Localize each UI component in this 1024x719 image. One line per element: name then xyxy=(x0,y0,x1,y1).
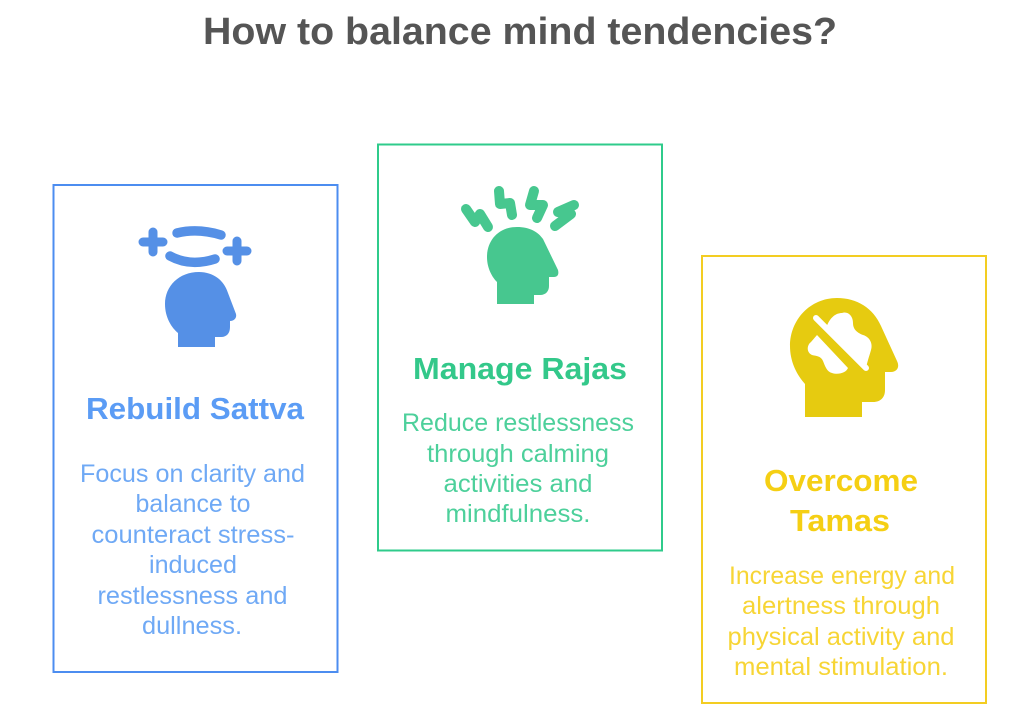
text block: Rebuild Sattva description: induced xyxy=(149,551,237,579)
card border: Overcome Tamas xyxy=(702,256,986,703)
text block: Manage Rajas description: activities and xyxy=(444,470,592,498)
text block: Overcome Tamas description: alertness through xyxy=(742,592,940,620)
text block: Rebuild Sattva description: restlessness and xyxy=(98,582,288,610)
text block: Rebuild Sattva description: balance to xyxy=(136,490,250,518)
text block: Manage Rajas description: Reduce restlessness xyxy=(402,409,634,437)
heading: Overcome Tamas: Tamas xyxy=(790,503,890,538)
heading: Overcome Tamas xyxy=(764,463,918,538)
heading: Manage Rajas: Manage Rajas xyxy=(413,351,627,386)
icon: head with crossed-out brain xyxy=(790,298,898,417)
text block: Manage Rajas description: mindfulness. xyxy=(446,500,590,528)
text block: Manage Rajas description: through calming xyxy=(427,440,609,468)
text block: Overcome Tamas description xyxy=(728,562,955,681)
text block: Rebuild Sattva description: dullness. xyxy=(142,612,242,640)
title: How to balance mind tendencies? xyxy=(203,11,837,53)
icon: head with lightning bolts xyxy=(466,191,574,304)
heading: Rebuild Sattva: Rebuild Sattva xyxy=(86,391,305,426)
text block: Rebuild Sattva description: Focus on clarity and xyxy=(80,460,305,488)
text block: Manage Rajas description xyxy=(402,409,634,528)
panel: Overcome Tamas xyxy=(702,256,986,703)
card border: Rebuild Sattva xyxy=(54,185,338,672)
text block: Overcome Tamas description: Increase energy and xyxy=(729,562,955,590)
text block: Overcome Tamas description: physical activity and xyxy=(728,623,954,651)
text block: Rebuild Sattva description xyxy=(80,460,305,640)
text block: Rebuild Sattva description: counteract stress- xyxy=(92,521,294,549)
panel: Manage Rajas xyxy=(378,144,662,550)
panel: Rebuild Sattva xyxy=(54,185,338,672)
heading: Overcome Tamas: Overcome xyxy=(764,463,918,498)
card border: Manage Rajas xyxy=(378,144,662,550)
text block: Overcome Tamas description: mental stimulation. xyxy=(734,653,948,681)
icon: head with balance symbols xyxy=(143,231,247,347)
